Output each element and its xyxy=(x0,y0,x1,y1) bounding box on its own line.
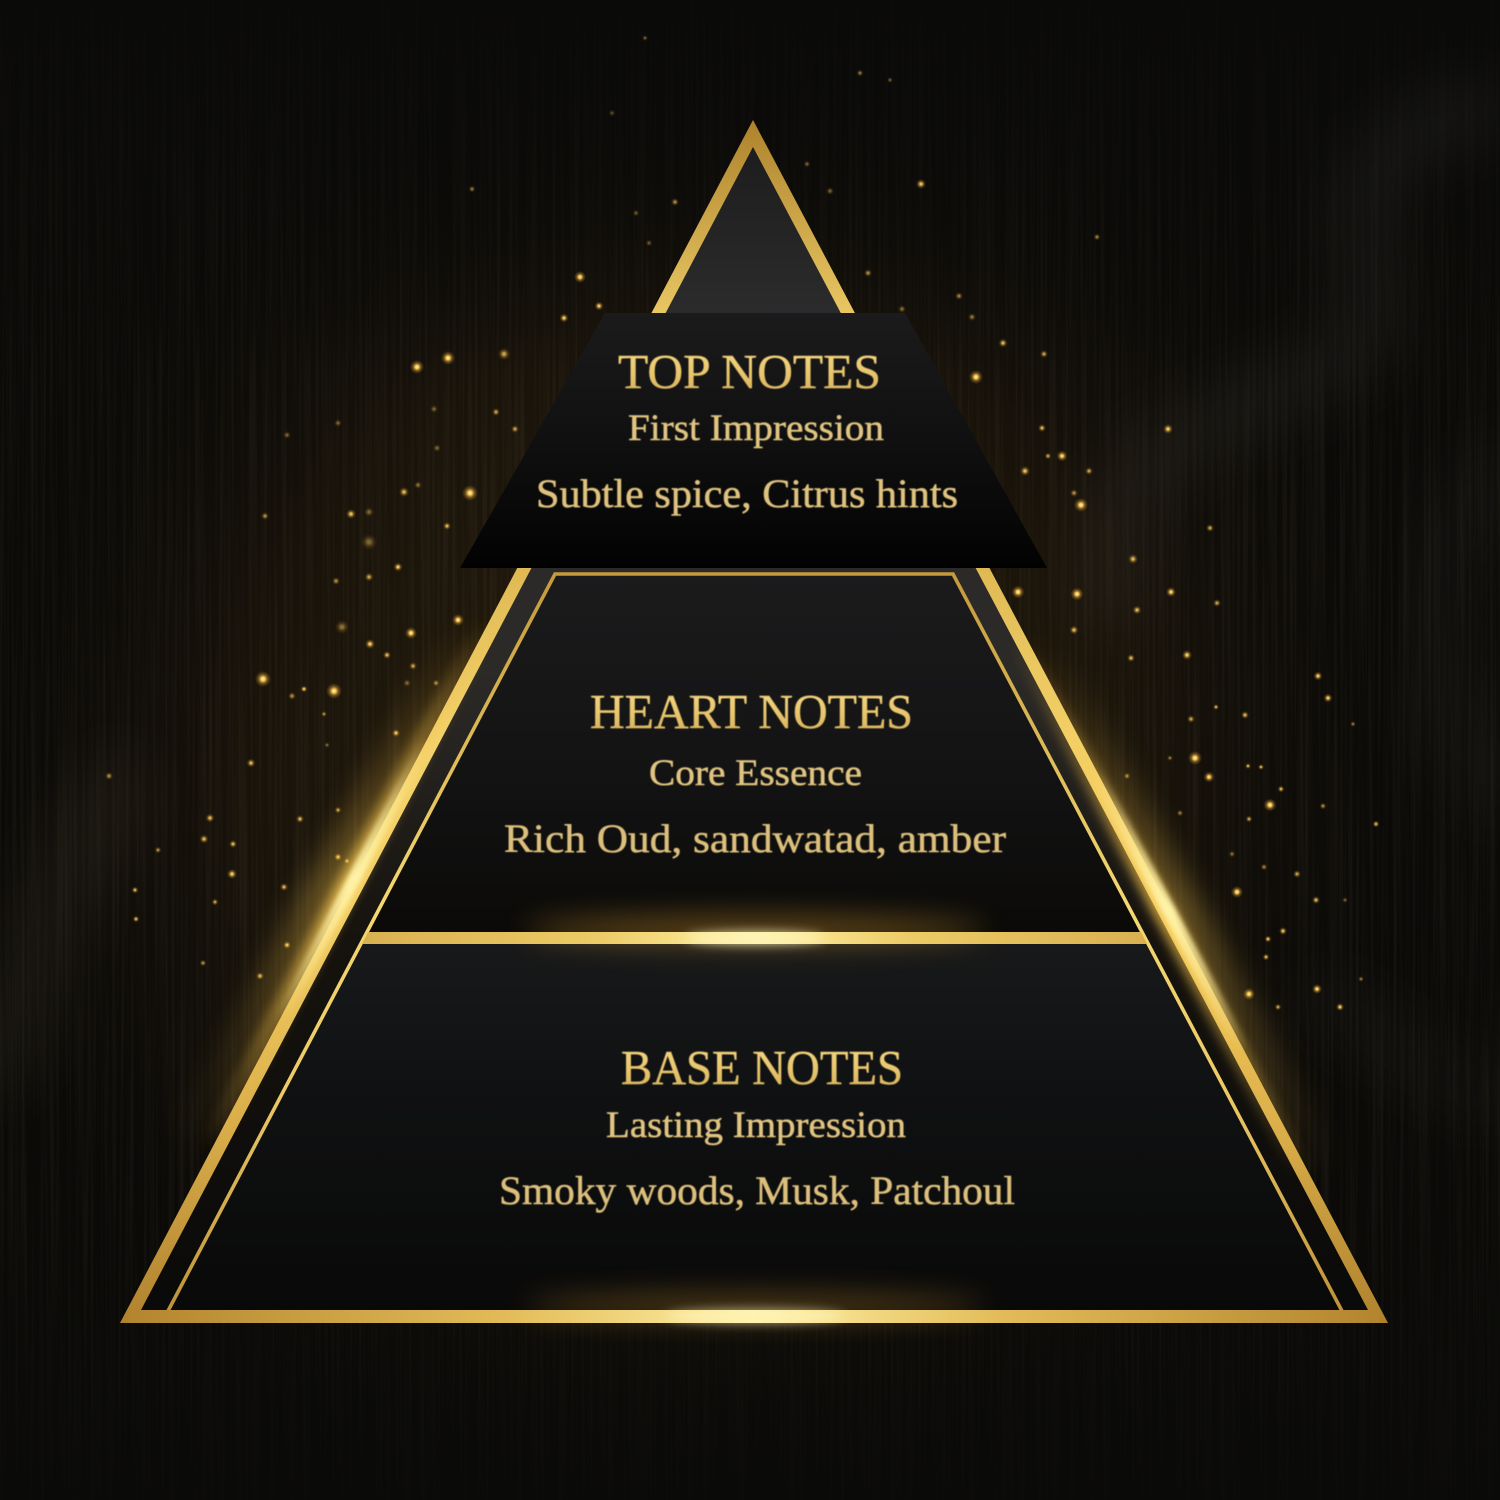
ingredients: top: Subtle spice, Citrus hints xyxy=(536,471,958,516)
panel: base notes background xyxy=(168,944,1342,1310)
divider bar between heart and base xyxy=(362,931,1147,945)
pyramid inner dark fill xyxy=(141,147,1368,1310)
inner warm glows above the divider bars xyxy=(525,916,985,1318)
heading: top notes: TOP NOTES xyxy=(618,344,881,399)
base bar xyxy=(128,1309,1380,1323)
subheading: core essence: Core Essence xyxy=(649,753,862,794)
bright light flares on edges xyxy=(208,620,1306,1180)
ingredients: heart: Rich Oud, sandwatad, amber xyxy=(504,816,1006,861)
pyramid outer gold frame xyxy=(120,120,1388,1323)
panel: top notes cap xyxy=(460,313,1047,568)
text: top notes xyxy=(536,344,958,516)
glow along the pyramid edges xyxy=(208,620,1306,1180)
subheading: first impression: First Impression xyxy=(628,408,884,449)
heading: heart notes: HEART NOTES xyxy=(590,684,913,739)
thin inner gold outline xyxy=(168,574,1342,1311)
ingredients: base: Smoky woods, Musk, Patchoul xyxy=(499,1168,1015,1213)
smoke wisps xyxy=(0,110,1500,1100)
panel: heart notes background xyxy=(367,574,1142,932)
heading: base notes: BASE NOTES xyxy=(621,1040,903,1095)
gold particles xyxy=(105,35,1380,1011)
text: base notes xyxy=(499,1040,1015,1213)
text: heart notes xyxy=(504,684,1006,861)
subheading: lasting impression: Lasting Impression xyxy=(606,1105,906,1146)
